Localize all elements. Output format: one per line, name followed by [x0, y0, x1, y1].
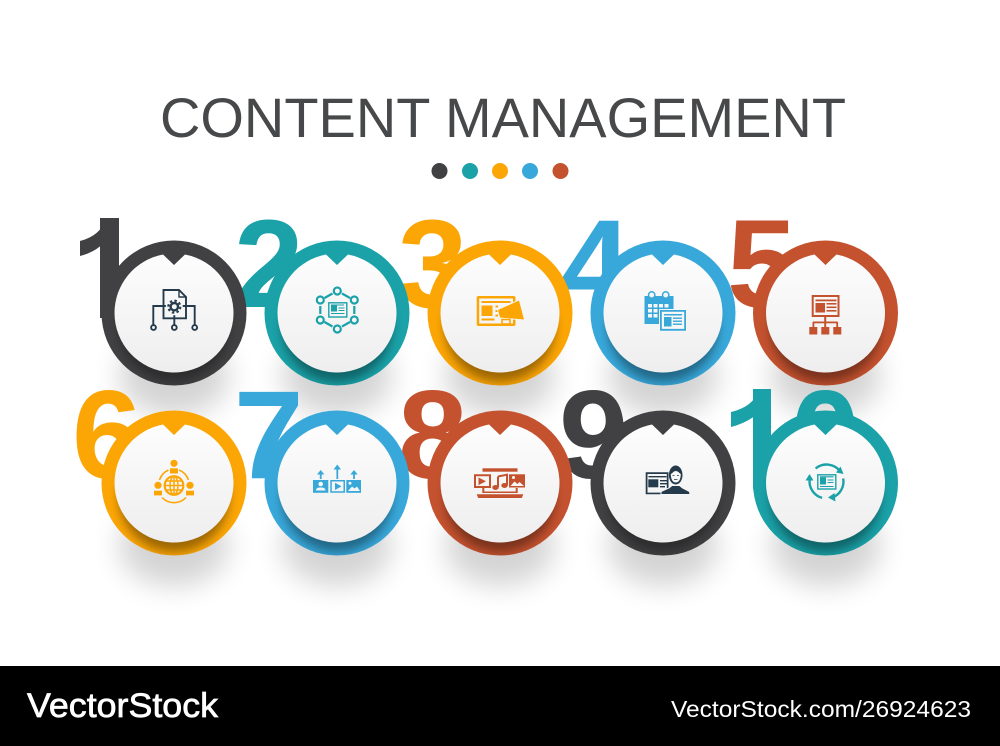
panel 1: 1	[66, 195, 136, 334]
panel 7: 7	[234, 366, 304, 505]
panel 4: 4	[561, 195, 631, 334]
icon: media laptop	[474, 468, 525, 498]
panel 10	[731, 389, 898, 596]
image id: VectorStock.com/26924623	[671, 696, 971, 722]
icon: content refresh	[806, 465, 844, 502]
icon: site map	[809, 295, 841, 334]
footer bar	[0, 666, 1000, 746]
panel 5	[730, 220, 898, 418]
title: CONTENT MANAGEMENT	[160, 86, 846, 149]
panel 6: 6	[72, 366, 142, 505]
icon: global team	[154, 460, 194, 503]
panel 9: 9	[559, 366, 629, 505]
panel 3: 3	[398, 195, 468, 334]
panel 6	[72, 366, 246, 586]
logo: VectorStock	[27, 687, 219, 725]
icon: media upload	[313, 464, 361, 493]
icon: author and article	[646, 466, 690, 494]
panel 4	[562, 220, 736, 418]
panel 5: 5	[727, 195, 797, 334]
panel 8	[398, 366, 572, 586]
icon: content network	[317, 288, 358, 332]
colour dots	[432, 163, 568, 179]
icon: calendar and page	[644, 292, 687, 332]
panel 9	[559, 366, 736, 586]
panel 10: 0	[790, 366, 860, 505]
panel 7	[234, 366, 410, 586]
panel 2: 2	[234, 195, 304, 334]
icon: article and megaphone	[477, 296, 524, 326]
panel 2	[239, 220, 410, 418]
icon: document workflow	[151, 290, 197, 330]
panel 1	[80, 218, 246, 418]
panel 3	[402, 220, 572, 418]
panel 10: 1	[718, 366, 788, 505]
panel 8: 8	[398, 366, 468, 505]
